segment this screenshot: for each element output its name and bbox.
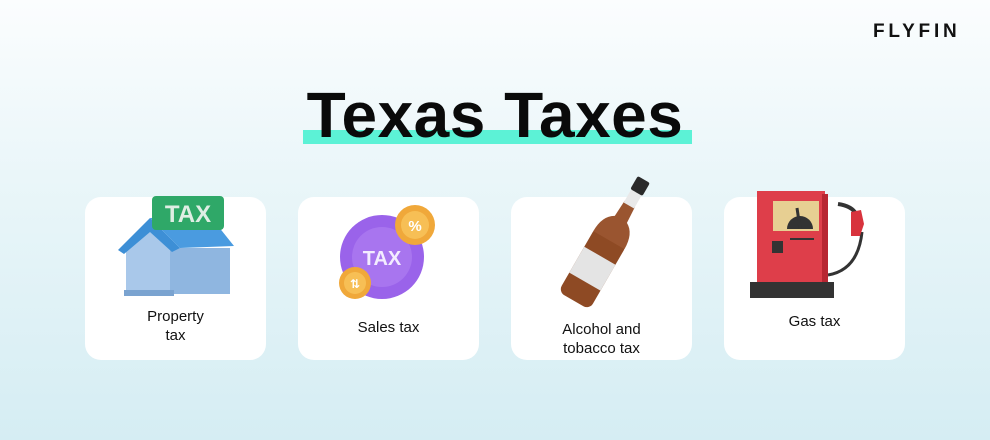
icon: gas pump [750, 191, 864, 298]
label: Alcohol and [562, 321, 641, 338]
panel: property tax [85, 197, 266, 360]
label [562, 321, 641, 357]
label: tobacco tax [563, 340, 640, 357]
icon: bottle [560, 176, 650, 308]
icon: tax coins [339, 205, 435, 299]
label: Gas tax [789, 313, 840, 330]
icon: tax coins: ⇅ [350, 277, 360, 291]
title: Texas Taxes [307, 79, 683, 151]
title highlight [303, 130, 692, 144]
panel: sales tax [298, 197, 479, 360]
icon: house with tax sign: TAX [165, 201, 211, 228]
icon: house with tax sign [118, 196, 234, 296]
icon: tax coins: TAX [363, 248, 402, 270]
panel: alcohol and tobacco tax [511, 197, 692, 360]
label: Property [147, 308, 204, 325]
label [147, 308, 204, 344]
panel: gas tax [724, 197, 905, 360]
label: Sales tax [358, 319, 419, 336]
logo: FLYFIN [873, 21, 961, 42]
icon: tax coins: % [408, 218, 422, 235]
label: tax [165, 327, 186, 344]
